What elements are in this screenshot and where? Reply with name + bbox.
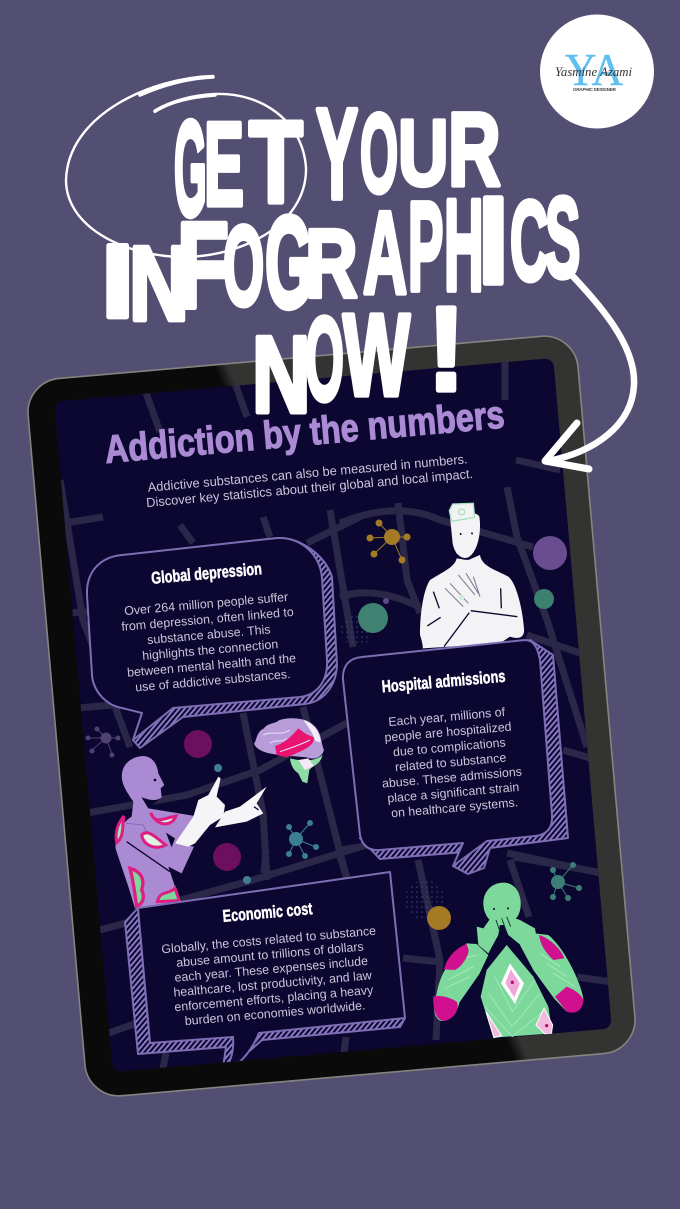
headline: GET YOUR INFOGRAPHICS NOW !: H (444, 174, 484, 319)
text: global depression body: use of addictive substances. (135, 667, 291, 694)
headline: GET YOUR INFOGRAPHICS NOW !: I (478, 171, 509, 309)
text: global depression body: highlights the connection (142, 637, 279, 663)
headline: GET YOUR INFOGRAPHICS NOW !: U (398, 100, 449, 205)
headline: GET YOUR INFOGRAPHICS NOW !: R (448, 92, 501, 208)
logo badge: YA (565, 44, 623, 95)
headline: GET YOUR INFOGRAPHICS NOW ! (101, 84, 580, 436)
headline: GET YOUR INFOGRAPHICS NOW !: R (305, 210, 358, 318)
icon: brain (254, 718, 324, 783)
text: economic cost body: burden on economies worldwide. (184, 998, 366, 1028)
title: Addiction by the numbers (103, 393, 506, 472)
decorative molecules and dots (86, 520, 582, 930)
figure: green person covering mouth (433, 883, 583, 1038)
text: global depression body: Over 264 million people suffer (124, 590, 289, 618)
heading: hospital admissions: Hospital admissions (381, 667, 506, 696)
panel: economic cost (125, 872, 405, 1075)
subtitle: Discover key statistics about their global and local impact. (146, 466, 474, 510)
tablet body (25, 333, 638, 1099)
panel: hospital admissions (343, 640, 568, 874)
logo badge (540, 14, 654, 128)
logo badge: GRAPHIC DESIGNER (573, 87, 617, 92)
text: economic cost body: abuse amount to trillions of dollars (176, 939, 364, 970)
text: economic cost body: enforcement efforts, placing a heavy (174, 983, 375, 1014)
heading: economic cost: Economic cost (222, 899, 313, 926)
panel: global depression (87, 538, 337, 748)
headline: GET YOUR INFOGRAPHICS NOW !: O (360, 92, 398, 217)
headline: GET YOUR INFOGRAPHICS NOW !: O (223, 203, 264, 329)
text: hospital admissions body: on healthcare systems. (391, 795, 519, 820)
headline: GET YOUR INFOGRAPHICS NOW !: W (343, 291, 410, 420)
figure: nurse in white (420, 503, 524, 648)
subtitle: Addictive substances can also be measured in numbers. (147, 451, 468, 495)
headline: GET YOUR INFOGRAPHICS NOW !: Y (316, 84, 358, 226)
text: global depression body (119, 589, 300, 695)
headline: GET YOUR INFOGRAPHICS NOW !: ! (428, 283, 465, 416)
arrow: from headline to tablet (545, 270, 634, 469)
text: economic cost body: healthcare, lost productivity, and law (173, 968, 372, 1000)
text: global depression body: between mental health and the (126, 651, 297, 680)
hand-drawn circle around GET (66, 76, 306, 257)
logo badge: Yasmine Azami (555, 64, 632, 79)
text: hospital admissions body: people are hospitalized (384, 720, 512, 745)
text: global depression body: substance abuse. This (147, 622, 271, 647)
headline: GET YOUR INFOGRAPHICS NOW !: I (101, 223, 134, 339)
headline: GET YOUR INFOGRAPHICS NOW !: N (129, 225, 189, 343)
headline: GET YOUR INFOGRAPHICS NOW !: G (265, 189, 312, 335)
text: hospital admissions body: due to complications (392, 735, 506, 759)
headline: GET YOUR INFOGRAPHICS NOW !: E (204, 98, 244, 230)
headline: GET YOUR INFOGRAPHICS NOW !: T (249, 97, 303, 227)
text: economic cost body: each year. These expenses include (174, 954, 369, 985)
text: economic cost body (162, 928, 376, 1025)
headline: GET YOUR INFOGRAPHICS NOW !: P (408, 178, 443, 317)
headline: GET YOUR INFOGRAPHICS NOW !: C (510, 178, 548, 304)
text: hospital admissions body: Each year, millions of (388, 705, 506, 729)
text: hospital admissions body: abuse. These admissions (381, 764, 522, 791)
headline: GET YOUR INFOGRAPHICS NOW !: N (252, 314, 310, 436)
text: hospital admissions body: related to substance (394, 751, 507, 774)
heading: global depression: Global depression (150, 559, 263, 588)
figure: lilac person pointing (115, 756, 267, 908)
text: global depression body: from depression, often linked to (121, 605, 294, 634)
tablet screen (54, 358, 612, 1072)
headline: GET YOUR INFOGRAPHICS NOW !: S (545, 174, 580, 301)
headline: GET YOUR INFOGRAPHICS NOW !: G (174, 93, 207, 245)
text: economic cost body: Globally, the costs related to substance (161, 924, 377, 956)
text: hospital admissions body (382, 707, 522, 818)
headline: GET YOUR INFOGRAPHICS NOW !: A (363, 188, 407, 318)
headline: GET YOUR INFOGRAPHICS NOW !: F (177, 198, 229, 334)
headline: GET YOUR INFOGRAPHICS NOW !: O (305, 293, 344, 426)
text: hospital admissions body: place a significant strain (387, 780, 520, 805)
